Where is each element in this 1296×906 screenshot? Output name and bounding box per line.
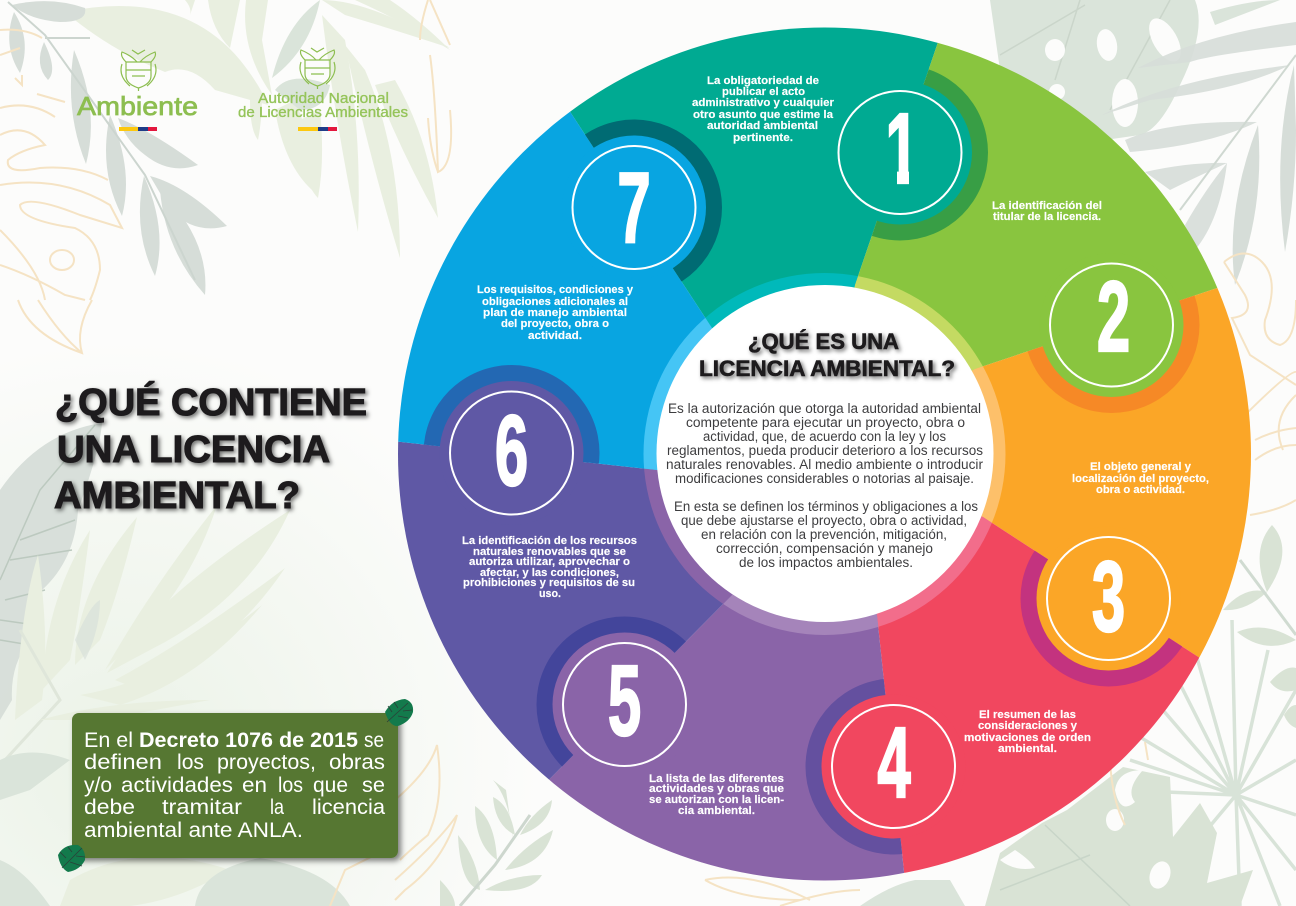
icon: monstera leaf bottom left bbox=[58, 845, 85, 872]
text: segment 2: La identificación del bbox=[992, 200, 1102, 212]
badge 1 bbox=[838, 70, 988, 240]
text: segment 1: publicar el acto bbox=[722, 86, 805, 98]
callout: Decreto 1076 de 2015: tramitar bbox=[162, 796, 242, 819]
logo: Autoridad Nacional de Licencias Ambientales: Autoridad Nacional bbox=[258, 90, 389, 107]
background foliage: top left bbox=[0, 0, 451, 353]
text: segment 4: motivaciones de orden bbox=[964, 732, 1091, 744]
callout: Decreto 1076 de 2015: actividades bbox=[121, 774, 233, 797]
text: segment 6: afectar, y las condiciones, bbox=[480, 567, 619, 579]
badge 1: 1 bbox=[885, 93, 919, 205]
text: segment 6: La identificación de los recursos bbox=[462, 535, 637, 547]
text: segment 4: ambiental. bbox=[998, 743, 1057, 755]
centre heading bbox=[699, 329, 955, 381]
text: segment 7: plan de manejo ambiental bbox=[483, 307, 627, 319]
circular diagram bbox=[398, 28, 1251, 880]
icon: coat of arms bbox=[121, 50, 156, 91]
text: segment 7: actividad. bbox=[528, 330, 582, 342]
callout: Decreto 1076 de 2015: licencia bbox=[312, 796, 385, 819]
centre body text: competente para ejecutar un proyecto, obra o bbox=[686, 415, 965, 430]
callout: Decreto 1076 de 2015 bbox=[58, 699, 413, 872]
callout: Decreto 1076 de 2015: los bbox=[278, 774, 303, 797]
text: segment 6 bbox=[462, 535, 637, 600]
callout: Decreto 1076 de 2015: definen bbox=[84, 751, 162, 774]
text: segment 3: El objeto general y bbox=[1090, 461, 1192, 473]
text: segment 5 bbox=[649, 773, 784, 817]
text: segment 5: se autorizan con la licen- bbox=[649, 794, 784, 806]
callout: Decreto 1076 de 2015: ambiental ante ANLA. bbox=[84, 819, 303, 842]
background foliage: top right bbox=[990, 0, 1296, 515]
icon: coat of arms bbox=[300, 48, 335, 89]
callout: Decreto 1076 de 2015: obras bbox=[329, 751, 385, 774]
centre body text: que debe ajustarse el proyecto, obra o actividad, bbox=[681, 513, 967, 528]
text: segment 1: otro asunto que estime la bbox=[693, 109, 834, 121]
centre heading: LICENCIA AMBIENTAL? bbox=[699, 356, 955, 381]
centre white circle bbox=[656, 285, 994, 622]
centre body text: de los impactos ambientales. bbox=[739, 555, 913, 570]
text: segment 6: prohibiciones y requisitos de su bbox=[463, 577, 635, 589]
text: segment 4: El resumen de las bbox=[979, 709, 1076, 721]
text: segment 7: Los requisitos, condiciones y bbox=[477, 284, 634, 296]
text: segment 5: actividades y obras que bbox=[649, 783, 784, 795]
centre body text bbox=[666, 401, 983, 570]
logo: Ambiente: Ambiente bbox=[77, 91, 198, 121]
text: segment 5: cia ambiental. bbox=[678, 805, 755, 817]
callout: Decreto 1076 de 2015: se bbox=[362, 774, 385, 797]
badge 7: 7 bbox=[617, 152, 651, 264]
centre body text: naturales renovables. Al medio ambiente o introducir bbox=[666, 457, 983, 472]
callout: Decreto 1076 de 2015: la bbox=[270, 796, 284, 819]
centre heading: ¿QUÉ ES UNA bbox=[748, 329, 899, 354]
text: segment 3 bbox=[1072, 461, 1209, 496]
callout: Decreto 1076 de 2015: en bbox=[242, 774, 267, 797]
badge 4: 4 bbox=[877, 707, 911, 819]
text: segment 3: localización del proyecto, bbox=[1072, 473, 1209, 485]
text: segment 1: pertinente. bbox=[733, 132, 793, 144]
background foliage: bottom right bbox=[705, 525, 1296, 906]
centre body text: reglamentos, pueda producir deterioro a los recursos bbox=[667, 443, 983, 458]
centre body text: En esta se definen los términos y obligaciones a los bbox=[674, 499, 978, 514]
centre body text: modificaciones considerables o notorias al paisaje. bbox=[675, 471, 974, 486]
badge 6: 6 bbox=[495, 395, 528, 507]
icon: monstera leaf top right bbox=[385, 699, 413, 726]
badge 5: 5 bbox=[608, 645, 641, 757]
text: segment 5: La lista de las diferentes bbox=[649, 773, 784, 785]
segment wedges bbox=[398, 28, 1251, 880]
background foliage: left and bottom left bbox=[0, 423, 553, 906]
callout: Decreto 1076 de 2015: que bbox=[313, 774, 348, 797]
text: segment 1: La obligatoriedad de bbox=[707, 75, 819, 87]
centre ring bbox=[644, 273, 1006, 635]
title: UNA LICENCIA bbox=[57, 429, 330, 471]
title: AMBIENTAL? bbox=[54, 475, 300, 517]
badge 7 bbox=[572, 120, 722, 282]
centre body text: corrección, compensación y manejo bbox=[716, 541, 933, 556]
badge 2: 2 bbox=[1097, 261, 1130, 373]
callout: Decreto 1076 de 2015: proyectos, bbox=[217, 751, 316, 774]
badge 4 bbox=[806, 679, 956, 854]
callout: Decreto 1076 de 2015: y/o bbox=[84, 774, 112, 797]
title bbox=[54, 380, 367, 517]
centre body text: en relación con la prevención, mitigación, bbox=[701, 527, 947, 542]
callout: Decreto 1076 de 2015: se bbox=[364, 729, 384, 752]
logo: Ambiente bbox=[77, 50, 198, 131]
text: segment 2: titular de la licencia. bbox=[993, 211, 1101, 223]
text: segment 1: autoridad ambiental bbox=[707, 120, 818, 132]
callout: Decreto 1076 de 2015: los bbox=[177, 751, 204, 774]
badge 3 bbox=[1020, 536, 1182, 686]
text: segment 1 bbox=[692, 75, 835, 144]
text: segment 4 bbox=[964, 709, 1091, 755]
text: segment 6: autoriza utilizar, aprovechar o bbox=[469, 556, 630, 568]
text: segment 6: naturales renovables que se bbox=[473, 546, 626, 558]
callout: Decreto 1076 de 2015: Decreto 1076 de 2015 bbox=[139, 729, 358, 752]
text: segment 3: obra o actividad. bbox=[1096, 484, 1185, 496]
badge 6 bbox=[424, 365, 600, 516]
text: segment 1: administrativo y cualquier bbox=[692, 97, 835, 109]
centre body text: Es la autorización que otorga la autoridad ambiental bbox=[668, 401, 981, 416]
title: ¿QUÉ CONTIENE bbox=[55, 380, 367, 424]
text: segment 2 bbox=[992, 200, 1102, 223]
callout: Decreto 1076 de 2015: debe bbox=[84, 796, 135, 819]
callout: Decreto 1076 de 2015: En el bbox=[84, 729, 133, 752]
text: segment 7 bbox=[477, 284, 634, 342]
badge 3: 3 bbox=[1092, 541, 1125, 653]
badge 5 bbox=[536, 616, 687, 767]
logo: Autoridad Nacional de Licencias Ambientales: de Licencias Ambientales bbox=[238, 104, 408, 121]
logo: Autoridad Nacional de Licencias Ambientales bbox=[238, 48, 408, 131]
text: segment 7: del proyecto, obra o bbox=[501, 318, 609, 330]
text: segment 6: uso. bbox=[539, 588, 561, 600]
centre body text: actividad, que, de acuerdo con la ley y los bbox=[703, 429, 946, 444]
text: segment 7: obligaciones adicionales al bbox=[482, 296, 628, 308]
text: segment 4: consideraciones y bbox=[978, 720, 1078, 732]
badge 2 bbox=[1028, 262, 1200, 413]
